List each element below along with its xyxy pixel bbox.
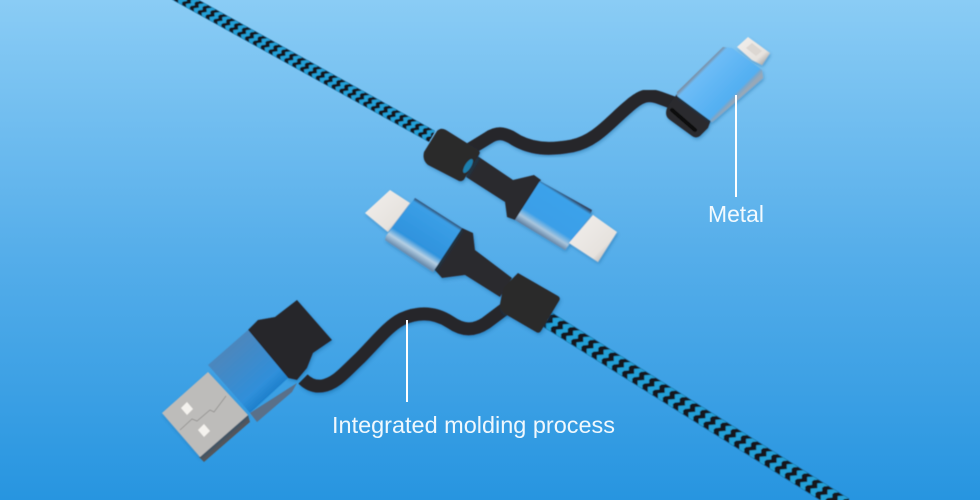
callout: metal: Metal [708, 201, 764, 227]
upper braided cable [175, 0, 432, 136]
USB-A plug side [199, 415, 250, 462]
USB-A plug [162, 372, 248, 457]
micro USB tip [737, 37, 770, 65]
micro USB black molded tail [666, 94, 711, 138]
cuff opening with braid [461, 158, 475, 174]
type-C black neck [466, 155, 541, 220]
type-C tip [569, 215, 617, 262]
callout: metal [708, 95, 764, 227]
USB-A plug seam [180, 396, 226, 430]
micro USB slot [672, 110, 695, 130]
USB-A hole top [181, 402, 193, 415]
type-C metal body, lower [385, 198, 462, 272]
type-C metal body [515, 181, 592, 250]
upper connector assembly [424, 37, 770, 262]
molded black branch cable to micro USB [470, 96, 682, 149]
lower connector assembly [162, 190, 560, 462]
type-C black neck, lower [432, 228, 512, 297]
type-C tip, lower [365, 190, 410, 232]
USB-A grey side of the body [250, 383, 297, 422]
callout: integrated molding process: Integrated molding process [332, 412, 615, 438]
lower braided cable [540, 315, 845, 500]
micro USB metal body [677, 47, 763, 122]
USB-A hole bottom [198, 424, 210, 437]
USB-A black boot [248, 300, 332, 380]
USB-A metal body [208, 330, 288, 413]
molded black branch cable to USB-A [303, 308, 506, 386]
lower cable cuff [500, 273, 560, 333]
upper cable cuff [424, 129, 480, 181]
